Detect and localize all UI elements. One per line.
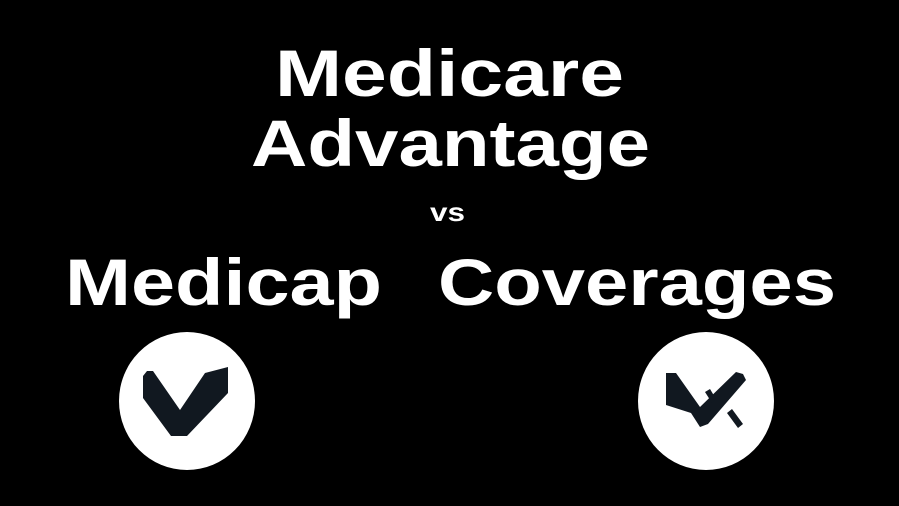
icon: left check circle [119, 332, 255, 470]
heading: Coverages: Coverages [438, 245, 836, 319]
vs label: vs [430, 197, 465, 227]
title: Medicare Advantage: Medicare [275, 36, 624, 110]
heading: Medicap: Medicap [65, 245, 382, 319]
title: Medicare Advantage [251, 36, 650, 180]
title: Medicare Advantage: Advantage [251, 106, 650, 180]
icon: right check-cross circle [638, 332, 774, 470]
